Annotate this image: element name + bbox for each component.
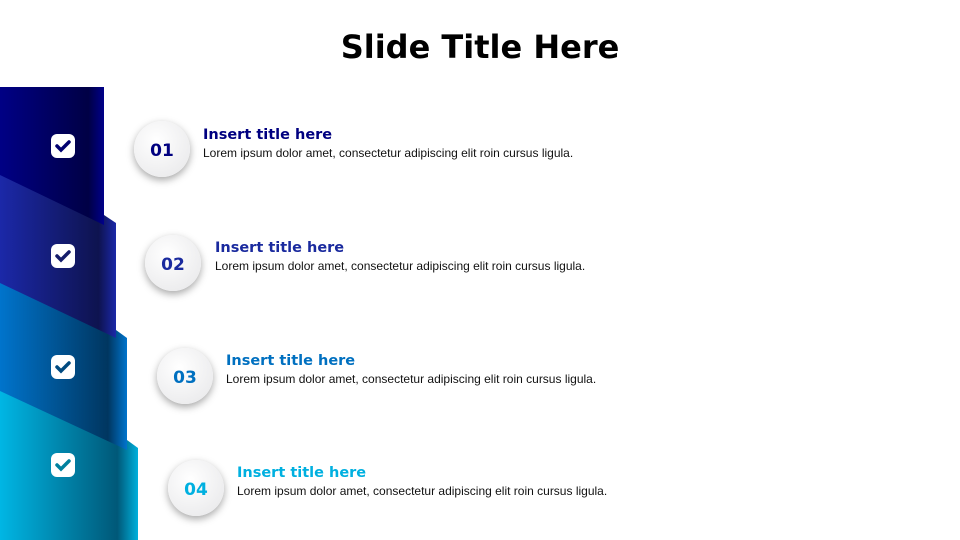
check icons <box>51 134 75 477</box>
item 4 text: Lorem ipsum dolor amet, consectetur adipiscing elit roin cursus ligula. <box>237 484 607 498</box>
item 3 text: Insert title here <box>226 353 355 369</box>
item 4 text: Insert title here <box>237 465 366 481</box>
item 2 text: Insert title here <box>215 240 344 256</box>
panel 3 <box>0 278 127 450</box>
item 3 text: Lorem ipsum dolor amet, consectetur adipiscing elit roin cursus ligula. <box>226 372 596 386</box>
item 1 text: Lorem ipsum dolor amet, consectetur adipiscing elit roin cursus ligula. <box>203 146 573 160</box>
circle 02: 02 <box>161 255 185 275</box>
circle 01 <box>134 121 190 177</box>
panel 1 <box>0 87 104 225</box>
item 3 text <box>226 353 596 386</box>
circle 03 <box>157 348 213 404</box>
item 4 text <box>237 465 607 498</box>
circle 03: 03 <box>173 368 197 388</box>
circle 04: 04 <box>184 480 208 500</box>
item 2 text <box>215 240 585 273</box>
item 1 text: Insert title here <box>203 127 332 143</box>
circle 02 <box>145 235 201 291</box>
panel 4 <box>0 380 138 540</box>
circle 01: 01 <box>150 141 174 161</box>
item 1 text <box>203 127 573 160</box>
title: Slide Title Here <box>341 28 619 66</box>
circle 04 <box>168 460 224 516</box>
panel 2 <box>0 170 116 338</box>
item 2 text: Lorem ipsum dolor amet, consectetur adipiscing elit roin cursus ligula. <box>215 259 585 273</box>
